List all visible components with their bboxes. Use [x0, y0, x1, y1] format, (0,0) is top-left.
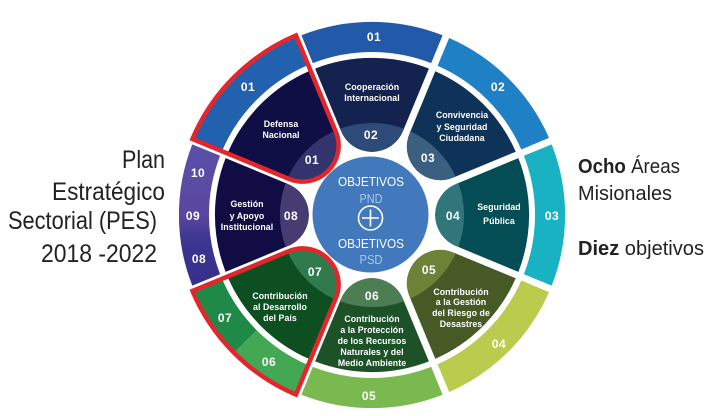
wedge: Cooperación Internacional: 02 — [364, 128, 378, 142]
wedge: Defensa Nacional: Nacional — [262, 130, 300, 140]
left heading: Plan Estratégico Sectorial: Sectorial (PES) — [8, 207, 157, 235]
red highlight: Defensa Nacional — [182, 25, 380, 223]
ring segments 06 and 07 — [186, 272, 315, 401]
wedge: Gestión del Riesgo de Desastres — [376, 219, 523, 366]
wedge: Protección de los Recursos Naturales: 06 — [365, 289, 379, 303]
wedge: Gestión del Riesgo de Desastres: del Riesgo de — [432, 308, 490, 318]
wedge: Protección de los Recursos Naturales: de los Recursos — [338, 336, 406, 346]
wedge: Contribución al Desarrollo del País: Contribución — [252, 291, 308, 301]
wedge: Defensa Nacional — [221, 64, 368, 211]
center circle: objetivos: PND — [360, 191, 382, 206]
ring segment 02: 02 — [491, 80, 505, 94]
right text: Ocho Áreas Misionales, Diez objetivos: Diez objetivos — [578, 238, 704, 260]
ring segments 06 and 07: 07 — [218, 311, 232, 325]
wedge: Seguridad Pública: Pública — [483, 216, 515, 226]
right text: Ocho Áreas Misionales, Diez objetivos — [578, 155, 704, 260]
ring segment 01 left: 01 — [241, 80, 255, 94]
inner wedges: strategic areas — [215, 58, 529, 372]
red highlight: Desarrollo del País — [182, 207, 380, 405]
outer ring: objectives — [179, 22, 565, 408]
center circle: objetivos — [312, 156, 428, 272]
center circle: objetivos: PSD — [360, 252, 382, 267]
wedge: Gestión del Riesgo de Desastres: Contribución — [433, 287, 489, 297]
wedge: Gestión y Apoyo Institucional: Gestión — [230, 199, 264, 209]
wedge: Contribución al Desarrollo del País: 07 — [308, 265, 322, 279]
icon: plus — [358, 206, 382, 230]
wedge: Contribución al Desarrollo del País: al Desarrollo — [253, 302, 308, 312]
ring segment 04 — [429, 272, 558, 401]
left heading: Plan Estratégico Sectorial: Plan — [122, 146, 165, 174]
right text: Ocho Áreas Misionales, Diez objetivos: Ocho Áreas — [578, 155, 680, 178]
ring segment 05: 05 — [362, 389, 376, 403]
ring segment 01 top — [301, 22, 443, 63]
wedge: Defensa Nacional: Defensa — [264, 119, 298, 129]
left heading: Plan Estratégico Sectorial — [8, 146, 165, 268]
ring segment 04: 04 — [492, 337, 506, 351]
ring segments 08 09 10 — [179, 144, 220, 286]
wedge: Gestión y Apoyo Institucional: 08 — [284, 209, 298, 223]
wedge: Protección de los Recursos Naturales: a la Protección — [340, 325, 404, 335]
wedge: Cooperación Internacional: Cooperación — [345, 82, 399, 92]
center circle: objetivos: OBJETIVOS — [338, 236, 404, 251]
wedge: Gestión del Riesgo de Desastres: 05 — [422, 263, 436, 277]
wedge: Seguridad Pública: Seguridad — [477, 202, 521, 212]
wedge: Gestión del Riesgo de Desastres: a la Gestión — [436, 297, 486, 307]
wedge: Convivencia y Seguridad Ciudadana: Ciudadana — [439, 133, 485, 143]
wedge: Gestión y Apoyo Institucional: Institucional — [221, 222, 273, 232]
ring segments 08 09 10: 08 — [192, 252, 206, 266]
wedge: Cooperación Internacional: Internacional — [344, 93, 400, 103]
left heading: Plan Estratégico Sectorial: Estratégico — [52, 178, 165, 206]
left heading: Plan Estratégico Sectorial: 2018 -2022 — [41, 240, 157, 268]
wedge: Gestión y Apoyo Institucional — [215, 158, 309, 272]
ring segment 01 left — [186, 29, 315, 158]
ring segment 05 — [301, 367, 443, 408]
wedge: Convivencia y Seguridad Ciudadana: 03 — [421, 151, 435, 165]
wedge: Convivencia y Seguridad Ciudadana — [376, 64, 523, 211]
wedge: Protección de los Recursos Naturales: Naturales y del — [340, 347, 404, 357]
wedge: Contribución al Desarrollo del País: del País — [263, 313, 297, 323]
ring segments 08 09 10: 09 — [186, 209, 200, 223]
wedge: Seguridad Pública — [435, 158, 529, 272]
wedge: Cooperación Internacional — [315, 58, 429, 152]
ring segment 02 — [429, 29, 558, 158]
wedge: Protección de los Recursos Naturales — [315, 278, 429, 372]
wedge: Contribución al Desarrollo del País — [221, 219, 368, 366]
wedge: Seguridad Pública: 04 — [446, 209, 460, 223]
ring segment 03: 03 — [545, 209, 559, 223]
wedge: Convivencia y Seguridad Ciudadana: Convivencia — [436, 110, 488, 120]
ring segments 06 and 07: 06 — [262, 355, 276, 369]
wedge: Protección de los Recursos Naturales: Contribución — [344, 314, 400, 324]
right text: Ocho Áreas Misionales, Diez objetivos: Misionales — [578, 183, 672, 205]
wedge: Defensa Nacional: 01 — [305, 153, 319, 167]
ring segments 08 09 10: 10 — [191, 166, 205, 180]
ring segment 01 top: 01 — [367, 30, 381, 44]
ring segment 03 — [524, 144, 565, 286]
wedge: Gestión y Apoyo Institucional: y Apoyo — [230, 211, 265, 221]
wedge: Convivencia y Seguridad Ciudadana: y Seguridad — [437, 122, 487, 132]
center circle: objetivos: OBJETIVOS — [338, 174, 404, 189]
wedge: Gestión del Riesgo de Desastres: Desastres — [440, 319, 482, 329]
wedge: Protección de los Recursos Naturales: Medio Ambiente — [338, 358, 406, 368]
